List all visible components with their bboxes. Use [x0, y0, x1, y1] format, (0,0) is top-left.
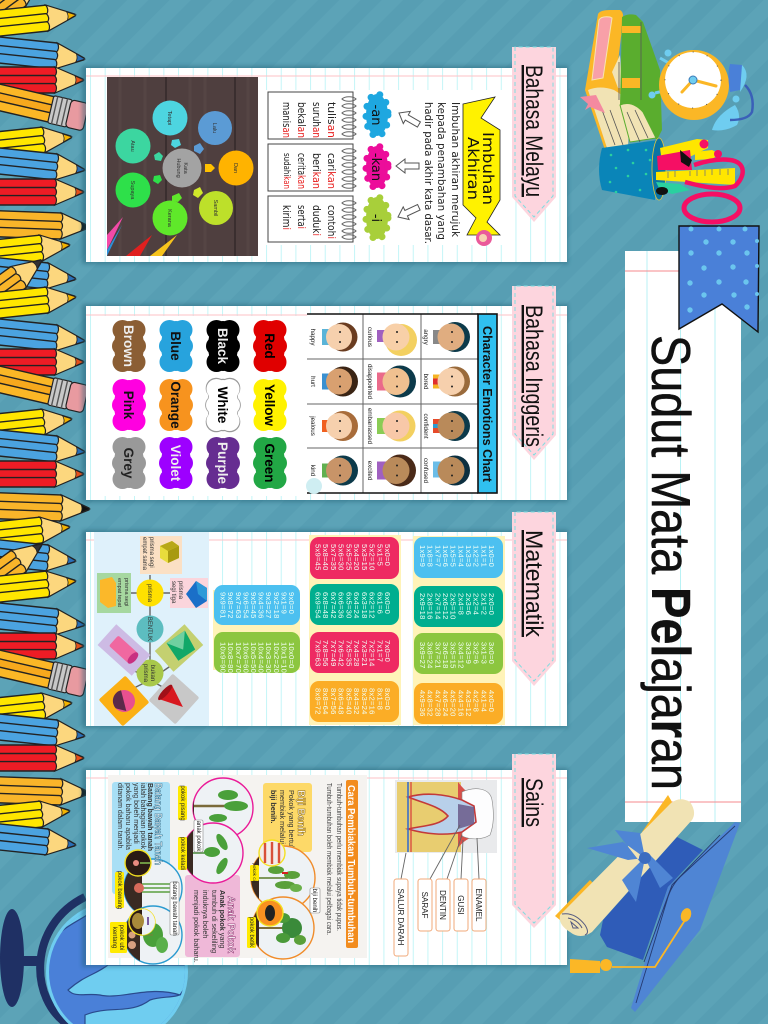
decoration: globe — [0, 897, 200, 1024]
diagram: shapes: prisma — [146, 584, 152, 603]
table 6: 6x4=24 — [352, 592, 361, 619]
section: biji benih: biji benih. — [269, 790, 278, 824]
tag: pokok pisang — [178, 785, 187, 821]
colour clouds: Brown — [121, 325, 136, 367]
table 4: 4x1=4 — [479, 690, 488, 712]
section: biji benih: Biji Benih — [295, 790, 306, 836]
emotion labels: embarrassed — [366, 408, 373, 445]
card: imbuhan akhiran — [265, 90, 508, 246]
table 9: 9x6=54 — [241, 592, 250, 619]
colour clouds: Grey — [121, 448, 136, 479]
label: dentin — [436, 879, 450, 931]
icon: pen cup with scissors and ruler — [599, 138, 743, 222]
table 5: 5x7=35 — [329, 544, 338, 571]
table 7: 7x8=56 — [321, 640, 330, 667]
poster: cara pembiakan tumbuh-tumbuhan — [108, 770, 367, 965]
section: anak pokok: Anak pokok yang — [218, 890, 227, 948]
label: salur darah: SALUR DARAH — [396, 889, 405, 946]
table 4: 4x0=0 — [487, 690, 496, 712]
badges: suffixes: -kan — [368, 153, 383, 181]
table 3: 3x4=12 — [456, 642, 465, 669]
panel: Bahasa Inggeris — [86, 286, 567, 500]
table 7: 7x6=42 — [336, 640, 346, 667]
section: batang bawah tanah: Batang Bawah Tanah — [152, 783, 163, 865]
panel: Bahasa Melayu — [86, 47, 567, 262]
notebook: -i words: contohi — [325, 205, 338, 239]
poster intro: Tumbuh-tumbuhan boleh membiak melalui pelbagai cara. — [325, 783, 332, 935]
shape: sphere — [99, 676, 149, 726]
badges: suffixes — [366, 94, 388, 239]
tag: pokok bawang — [115, 871, 124, 909]
table 6: 6x3=18 — [360, 592, 369, 619]
tag: pokok ubi kentang: kentang — [111, 927, 117, 948]
poster intro — [325, 783, 342, 935]
table 6: 6x0=0 — [383, 592, 392, 614]
box: prisma segi empat sama — [140, 536, 182, 574]
table 8: 8x5=40 — [344, 688, 353, 715]
image: wood background with conjunction diagram: Sambil — [212, 200, 218, 216]
panel: Matematik — [86, 512, 567, 726]
table 8: 8x7=56 — [329, 688, 338, 715]
table 9: 9x3=27 — [264, 592, 273, 619]
table 7: 7x4=28 — [352, 640, 361, 667]
tag: pokok cili: pokok cili — [251, 863, 257, 883]
table 1: 1x0=0 — [487, 545, 496, 567]
table 2: 2x9=18 — [418, 593, 427, 620]
tag: pokok keladi — [178, 837, 187, 870]
colour clouds: Orange — [168, 381, 183, 429]
emotion labels: curious — [366, 327, 373, 347]
section: biji benih: Pokok yang bertubuh — [287, 790, 296, 858]
emotion labels: bored — [422, 374, 429, 390]
notebook: -kan words: sudahikan — [281, 153, 291, 189]
table 2 — [414, 586, 503, 627]
badges: suffixes: -an — [368, 105, 383, 125]
icon: alarm clock — [648, 50, 753, 130]
table 7: 7x5=35 — [344, 640, 353, 667]
tag: biji benih — [310, 888, 320, 913]
table 1: 1x1=1 — [479, 545, 488, 567]
table 7: 7x3=21 — [360, 640, 369, 667]
notebook: -an words: suruhan — [310, 102, 323, 138]
table 6: 6x2=12 — [368, 592, 376, 619]
colour clouds — [94, 316, 299, 496]
table 2: 2x8=16 — [426, 593, 435, 620]
emotion labels: angry — [422, 329, 429, 346]
banner: Imbuhan Akhiran: Imbuhan — [479, 132, 497, 205]
box: prisma segi empat tepat: prisma segi — [123, 578, 129, 606]
colour clouds: Purple — [215, 442, 230, 484]
emotion labels: disappointed — [366, 364, 373, 400]
notebook: -an words: bekalan — [295, 102, 308, 138]
ribbon: Bahasa Melayu: Bahasa Melayu — [520, 65, 547, 197]
notebook: -an words: tulis an — [325, 102, 338, 138]
tag: biji benih: biji benih — [311, 889, 317, 912]
table 3: 3x9=27 — [418, 642, 427, 669]
faces — [322, 322, 470, 486]
tag: batang bawah tanah — [170, 881, 179, 936]
table 8: 8x1=8 — [375, 688, 384, 710]
table 9: 9x7=63 — [234, 592, 243, 619]
table 8: 8x4=32 — [352, 688, 361, 715]
section: anak pokok — [178, 770, 253, 963]
ribbon: Bahasa Melayu — [512, 47, 556, 222]
table 3: 3x2=6 — [472, 642, 481, 664]
table 5: 5x4=20 — [352, 544, 361, 571]
table 3: 3x3=9 — [464, 642, 473, 664]
table 7: 7x2=14 — [368, 640, 376, 667]
notebook: -i words: kirimi — [280, 205, 293, 230]
icon: stacked books — [580, 10, 662, 150]
table 9: 9x0=0 — [287, 592, 296, 614]
table 1: 1x9=9 — [418, 545, 427, 567]
table 7: 7x7=49 — [329, 640, 338, 667]
box: prisma segi empat sama: prisma segi — [148, 537, 154, 568]
image: wood background with conjunction diagram: Tetapi — [166, 111, 172, 125]
colour clouds: Yellow — [262, 384, 277, 426]
colour clouds: White — [215, 387, 230, 424]
table 4: 4x5=20 — [449, 690, 458, 717]
table 2: 2x2=4 — [472, 593, 481, 615]
table 6: 6x5=30 — [344, 592, 353, 619]
chart header: Character Emotions Chart — [480, 326, 495, 483]
table 9: 9x1=9 — [279, 592, 288, 614]
diagram: shapes — [94, 532, 209, 726]
label: gusi — [454, 879, 468, 931]
table 6: 6x8=48 — [321, 592, 330, 619]
section: biji benih — [247, 783, 320, 960]
emotion labels: jealous — [309, 415, 316, 436]
tag: pokok cili — [250, 863, 259, 883]
table 1: 1x2=2 — [472, 545, 481, 567]
table 3: 3x5=15 — [449, 642, 458, 669]
table 4: 4x3=12 — [464, 690, 473, 717]
image: wood background with conjunction diagram: Kerana — [166, 209, 172, 228]
table 8: 8x2=16 — [368, 688, 376, 715]
shape: pyramid — [155, 624, 203, 672]
notebook: -i words: sertai — [295, 205, 308, 229]
label: saraf: SARAF — [420, 892, 429, 918]
box: prisma segi empat tepat: empat tepat — [116, 578, 122, 608]
table 1 — [414, 537, 503, 578]
table 6: 6x1=6 — [375, 592, 384, 614]
table 2: 2x5=10 — [449, 593, 458, 620]
table 4: 4x7=28 — [433, 690, 442, 717]
colour clouds: Blue — [168, 331, 183, 361]
table 4 — [414, 683, 503, 724]
image: wood background with conjunction diagram: Dan — [232, 163, 238, 173]
table 2: 2x7=14 — [433, 593, 442, 620]
table 8: 8x3=24 — [360, 688, 369, 715]
text: imbuhan explanation: hadir pada akhir kata dasar. — [422, 102, 435, 244]
table 5: 5x2=10 — [368, 544, 376, 571]
table 3: 3x0=0 — [487, 642, 496, 664]
table 3 — [414, 633, 503, 674]
text: imbuhan explanation: kepada penambahan yang — [435, 102, 448, 240]
table 9: 9x2=18 — [272, 592, 281, 619]
notebook: -kan words — [268, 144, 356, 191]
diagram: shapes: bukan — [149, 665, 155, 681]
section: anak pokok: tumbuh di sekeliling — [210, 890, 219, 953]
icon: diploma scroll — [555, 795, 694, 936]
image: wood background with conjunction diagram: Kata — [182, 162, 188, 175]
emotion labels: happy — [309, 329, 316, 346]
section: batang bawah tanah: Batang bawah tanah — [146, 783, 153, 851]
table 5: 5x5=25 — [344, 544, 353, 571]
colour clouds: Red — [262, 333, 277, 359]
badges: suffixes: -i — [368, 214, 383, 222]
section: batang bawah tanah: yang boleh menjadi — [132, 783, 139, 844]
table 10: 10x6=60 — [241, 642, 250, 673]
table 9: 9x9=81 — [219, 592, 228, 619]
table 1: 1x7=7 — [433, 545, 442, 567]
notebook: -i words — [268, 196, 356, 242]
ribbon: Matematik: Matematik — [520, 530, 547, 638]
ribbon: Bahasa Inggeris — [512, 286, 556, 460]
table 10: 10x0=0 — [287, 642, 296, 669]
ribbon: Sains — [512, 754, 556, 928]
table 10 — [214, 632, 300, 673]
shape: cone — [149, 674, 199, 724]
tag: pokok betik: pokok betik — [248, 917, 254, 948]
table 3: 3x7=21 — [433, 642, 442, 669]
emotion labels: confident — [422, 413, 429, 439]
table 7: 7x1=7 — [375, 640, 384, 662]
table 10: 10x3=30 — [264, 642, 273, 673]
icon: graduation cap — [570, 822, 740, 1012]
table 6: 6x9=54 — [313, 592, 322, 619]
image: wood background with conjunction diagram: Supaya — [129, 181, 135, 200]
notebook: -kan words: berikan — [310, 153, 323, 189]
table 4: 4x8=32 — [426, 690, 435, 717]
panel: Sains — [86, 754, 567, 965]
table 2: 2x0=0 — [487, 593, 496, 615]
table 8: 8x0=0 — [383, 688, 392, 710]
table 1: 1x5=5 — [449, 545, 458, 567]
table 1: 1x6=6 — [441, 545, 450, 567]
table 9: 9x5=45 — [249, 592, 258, 619]
label: salur darah — [394, 879, 408, 956]
table 3: 3x6=18 — [441, 642, 450, 669]
arrows — [395, 107, 422, 223]
notebook: -an words: manisan — [280, 102, 293, 138]
table 5 — [310, 537, 399, 579]
table 4: 4x2=8 — [472, 690, 481, 712]
table 3: 3x8=24 — [426, 642, 435, 669]
section: batang bawah tanah: ialah bahagian pokok — [139, 783, 146, 850]
table 5: 5x1=5 — [375, 544, 384, 566]
table 9 — [214, 585, 300, 625]
table 2: 2x1=2 — [479, 593, 488, 615]
label: gusi: GUSI — [456, 895, 465, 915]
table 1: 1x4=4 — [456, 545, 465, 567]
box: prisma segi tiga: segi tiga — [170, 581, 176, 604]
emotion labels: confused — [422, 458, 429, 484]
colour clouds: Violet — [168, 445, 183, 482]
tag: pokok betik — [247, 917, 256, 948]
text: imbuhan explanation: Imbuhan akhiran merujuk — [449, 102, 462, 238]
table 8: 8x6=48 — [336, 688, 346, 715]
ribbon: Sains: Sains — [520, 778, 547, 827]
table 2: 2x4=8 — [456, 593, 465, 615]
table 8: 8x8=64 — [321, 688, 330, 715]
tag: pokok keladi: pokok keladi — [179, 837, 185, 870]
box: prisma segi tiga: prisma — [177, 581, 183, 600]
tag: anak pokok: anak pokok — [195, 821, 201, 852]
image: wood background with conjunction diagram: Hubung — [175, 158, 181, 178]
poster intro: Tumbuh-tumbuhan perlu membiak supaya tidak pupus. — [335, 783, 342, 931]
emotion labels — [309, 327, 429, 484]
table 5: 5x3=15 — [360, 544, 369, 571]
table 4: 4x9=36 — [418, 690, 427, 717]
table 5: 5x6=30 — [336, 544, 346, 571]
image: wood background with conjunction diagram — [107, 77, 258, 256]
notebook: -i words: duduki — [310, 205, 323, 236]
tag: pokok pisang: pokok pisang — [179, 785, 185, 821]
section: anak pokok: Anak Pokok — [225, 896, 236, 954]
shape: cylinder — [98, 624, 150, 676]
table 10: 10x7=70 — [234, 642, 243, 673]
table 10: 10x5=50 — [249, 642, 258, 673]
table 9: 9x8=72 — [226, 592, 235, 619]
table 5: 5x0=0 — [383, 544, 392, 566]
text: imbuhan explanation — [422, 102, 462, 244]
emotion labels: excited — [366, 461, 373, 481]
section: biji benih: membiak melalui — [278, 790, 287, 844]
table 5: 5x9=45 — [313, 544, 322, 571]
table 10: 10x2=20 — [272, 642, 281, 673]
label: enamel: ENAMEL — [474, 889, 483, 922]
table 3: 3x1=3 — [479, 642, 488, 664]
image: wood background with conjunction diagram: Atau — [129, 140, 135, 152]
decoration: pencils border — [0, 0, 90, 858]
table 6: 6x6=36 — [336, 592, 346, 619]
table 1: 1x8=8 — [426, 545, 435, 567]
poster title: Cara Pembiakan Tumbuh-tumbuhan — [345, 785, 357, 943]
chart: character emotions — [306, 314, 498, 494]
notebook: -an words — [268, 92, 356, 139]
tag: batang bawah tanah: batang bawah tanah — [171, 881, 177, 936]
box: prisma segi empat tepat — [97, 573, 131, 613]
ribbon: Bahasa Inggeris: Bahasa Inggeris — [520, 305, 547, 447]
title: Sudut Mata Pelajaran — [640, 335, 702, 790]
table 6: 6x7=42 — [329, 592, 338, 619]
table 1: 1x3=3 — [464, 545, 473, 567]
table 10: 10x9=90 — [219, 642, 228, 673]
tag: pokok ubi kentang: pokok ubi — [118, 925, 124, 950]
tag: pokok bawang: pokok bawang — [116, 871, 122, 909]
box: prisma segi tiga — [170, 578, 208, 608]
times tables background — [213, 535, 505, 725]
table 4: 4x6=24 — [441, 690, 450, 717]
emotion labels: hurt — [309, 376, 316, 387]
table 10: 10x4=40 — [257, 642, 266, 673]
label: enamel — [472, 879, 486, 931]
table 6 — [310, 584, 399, 625]
label: saraf — [418, 879, 432, 931]
table 9: 9x4=36 — [257, 592, 266, 619]
table 8 — [310, 681, 399, 722]
table 10: 10x1=10 — [279, 642, 288, 673]
colour clouds: Pink — [121, 391, 136, 420]
panel shadows — [82, 66, 568, 967]
table 7: 7x9=63 — [313, 640, 322, 667]
section: anak pokok: menjadi pokok baharu. — [192, 890, 201, 963]
label: dentin: DENTIN — [438, 890, 447, 920]
image: wood background with conjunction diagram: Lalu — [211, 123, 217, 133]
section: batang bawah tanah: pokok baharu apabila — [124, 783, 131, 850]
table 5: 5x8=40 — [321, 544, 330, 571]
ribbon: Matematik — [512, 512, 556, 686]
table 4: 4x4=16 — [456, 690, 465, 717]
section: batang bawah tanah — [110, 782, 182, 965]
table 2: 2x6=12 — [441, 593, 450, 620]
tag: pokok ubi kentang — [110, 922, 127, 953]
icon: blue bookmark flag — [679, 226, 759, 332]
notebook: -kan words: carikan — [325, 153, 338, 189]
section: anak pokok: induknya boleh — [201, 890, 210, 938]
banner: Imbuhan Akhiran — [463, 97, 500, 246]
emotion labels: kind — [309, 465, 316, 477]
table 7 — [310, 632, 399, 673]
diagram: tooth anatomy — [394, 780, 497, 956]
section: batang bawah tanah: ditanam dalam tanah. — [116, 783, 123, 850]
notebook: -kan words: ceritakan — [295, 153, 308, 189]
table 2: 2x3=6 — [464, 593, 473, 615]
colour clouds: Black — [215, 328, 230, 365]
banner: Imbuhan Akhiran: Akhiran — [464, 137, 482, 200]
tag: anak pokok — [194, 820, 203, 852]
table 8: 8x9=72 — [313, 688, 322, 715]
diagram: shapes: prisma — [142, 664, 148, 683]
table 10: 10x8=80 — [226, 642, 235, 673]
diagram: shapes: BENTUK — [146, 617, 152, 641]
colour clouds: Green — [262, 443, 277, 483]
table 7: 7x0=0 — [383, 640, 392, 662]
title panel — [625, 251, 741, 822]
box: prisma segi empat sama: empat sama — [141, 537, 147, 571]
